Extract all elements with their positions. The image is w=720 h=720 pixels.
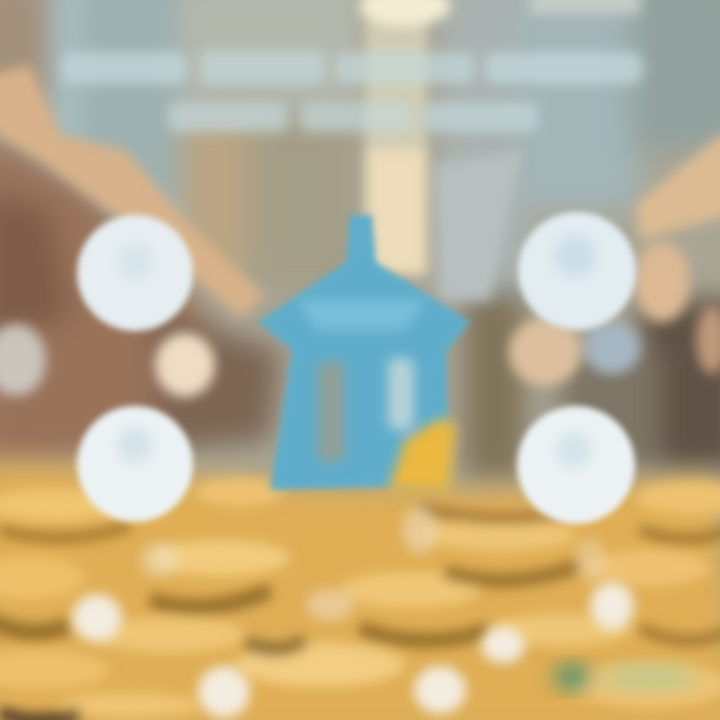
- bank building icon: [258, 215, 470, 492]
- right hand and arm: [509, 130, 720, 386]
- left hand and arm: [0, 65, 280, 470]
- circle: top left: [77, 215, 193, 331]
- green accent, bottom right: [554, 663, 700, 691]
- circle: top right: [518, 212, 636, 330]
- circle: bottom right: [517, 406, 635, 524]
- gold coin pile: [0, 460, 720, 720]
- title: blurred lines: [62, 50, 643, 132]
- connector dots: [72, 506, 634, 718]
- circle: bottom left: [77, 406, 193, 522]
- central pale column: [359, 0, 640, 300]
